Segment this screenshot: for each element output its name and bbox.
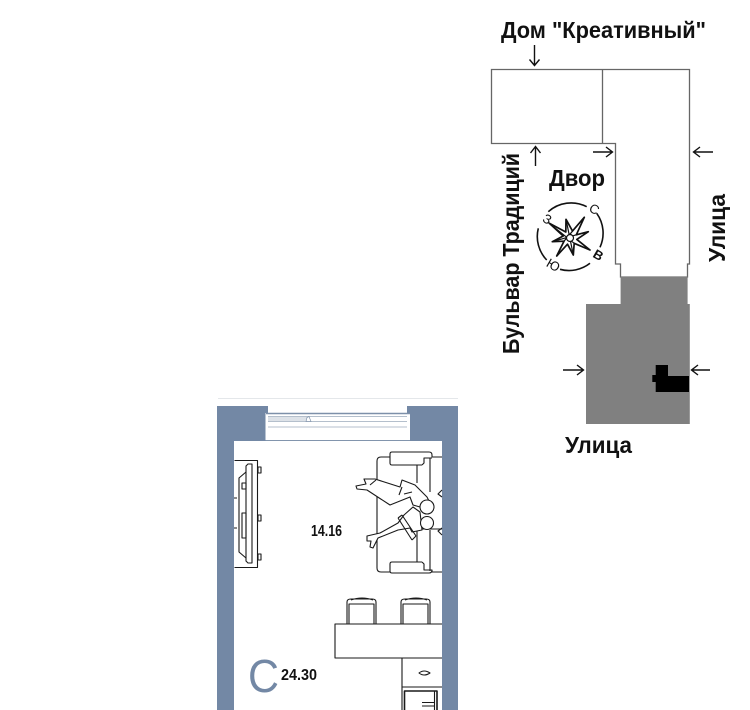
TV unit xyxy=(234,460,261,568)
arrow: right to lower block xyxy=(563,365,584,375)
compass: С xyxy=(586,200,602,218)
site plan: building outline xyxy=(492,70,690,277)
window xyxy=(266,414,410,440)
site plan: apartment location marker xyxy=(652,365,689,392)
bar stools xyxy=(347,598,430,624)
arrow: up from courtyard xyxy=(530,146,540,166)
compass: В xyxy=(590,246,606,264)
arrow: right into courtyard side xyxy=(593,147,612,157)
sofa xyxy=(377,452,442,573)
area label: total: 24.30 xyxy=(281,667,317,684)
arrow: left to lower block xyxy=(692,365,710,375)
compass xyxy=(537,200,606,275)
label: courtyard: Двор xyxy=(549,165,605,191)
faint upper line of plan xyxy=(218,398,458,400)
heading: house name: Дом "Креативный" xyxy=(501,17,706,43)
label: street bottom: Улица xyxy=(565,432,632,458)
arrow: entrance from house xyxy=(530,45,540,66)
site plan: grey building section xyxy=(586,277,690,424)
arrow: left from street xyxy=(694,147,713,157)
area label: living room: 14.16 xyxy=(311,523,342,540)
label: street right: Улица xyxy=(704,194,730,262)
apartment walls xyxy=(217,406,458,710)
people on sofa xyxy=(356,479,434,548)
compass: З xyxy=(540,211,555,228)
kitchen counter and table xyxy=(335,624,442,710)
apartment type letter: С xyxy=(248,650,279,702)
compass: Ю xyxy=(544,255,563,275)
label: boulevard: Бульвар Традиций xyxy=(498,153,524,354)
